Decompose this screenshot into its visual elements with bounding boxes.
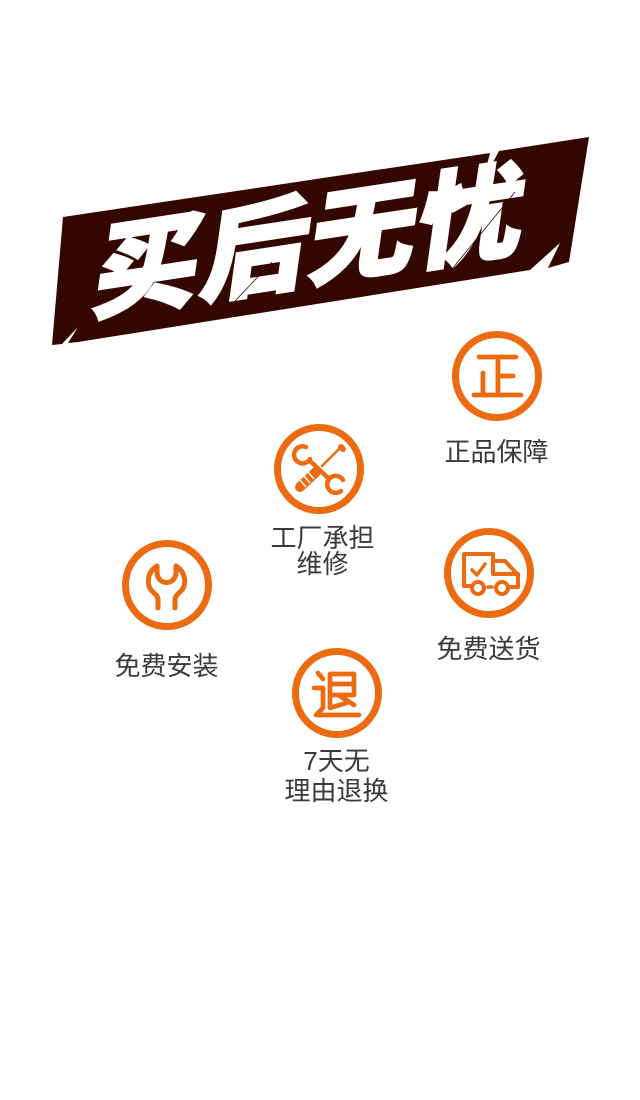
icon: 正 badge	[456, 334, 538, 418]
banner title: 买后无忧	[87, 151, 533, 335]
item: 免费送货	[436, 532, 541, 664]
label: 免费送货	[436, 634, 541, 664]
item: 免费安装	[114, 544, 219, 681]
item: 7天无理由退换	[284, 652, 389, 806]
label: 正品保障	[444, 437, 549, 467]
label: 工厂承担	[270, 523, 375, 553]
label: 免费安装	[114, 651, 219, 681]
item: 工厂承担维修	[270, 428, 375, 579]
banner background	[52, 137, 589, 345]
item: 正品保障	[444, 334, 549, 467]
icon: crossed wrench and screwdriver	[278, 428, 360, 510]
icon: 退 badge	[296, 652, 378, 734]
title crack lines	[235, 192, 515, 301]
item: 工厂承担维修: 维修	[296, 549, 349, 579]
icon: wrench	[126, 544, 208, 626]
banner: 买后无忧	[52, 137, 589, 345]
item: 7天无理由退换: 理由退换	[284, 776, 389, 806]
label: 7天无	[303, 746, 370, 776]
icon: delivery truck	[448, 532, 530, 614]
